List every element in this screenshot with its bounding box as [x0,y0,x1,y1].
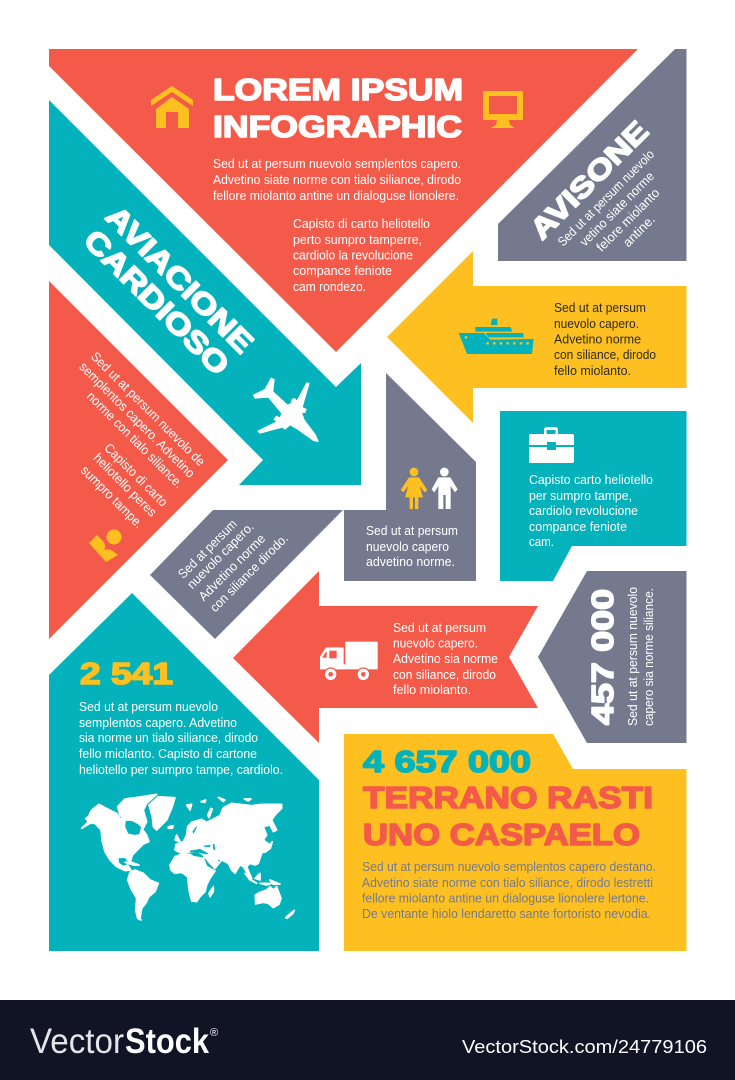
text block: avisone body: antine. [620,212,658,250]
panel: yellow ship arrow [387,251,686,423]
text block: 457 000 [625,587,656,726]
text block: ship: con siliance, dirodo [554,347,656,362]
text block: red left rotated: Capisto di carto [102,440,171,509]
number: 2 541: 2 541 [80,656,173,691]
text block: terrano [362,859,656,921]
heading: aviacione cardioso: CARDIOSO [77,224,235,382]
text block: ship: nuevolo capero. [554,316,639,331]
text block: terrano: Advetino siate norme con tialo siliance, dirodo lestretti [362,875,653,890]
title: INFOGRAPHIC [213,109,462,144]
icon: truck [320,642,378,681]
title [213,72,463,144]
heading: terrano rasti: TERRANO RASTI [363,780,653,815]
text block: grey middle rotated: Advetino norme [195,531,268,604]
heading: terrano rasti: UNO CASPAELO [363,817,640,852]
footer band [0,1000,735,1080]
text block: title second paragraph: Capisto di carto heliotello [293,216,430,231]
text block: truck: fello miolanto. [393,682,471,697]
panel: yellow terrano [344,734,686,951]
text block: truck: Advetino sia norme [393,651,498,666]
text block: people [366,523,458,569]
icon: monitor [483,91,523,128]
text block: 457 000: Sed ut at persum nuevolo [625,587,640,726]
text block: world map: sia norme un tialo siliance, dirodo [79,730,258,745]
text block: world map: Sed ut at persum nuevolo [79,699,218,714]
footer logo: Vector [30,1022,124,1061]
text block: people: nuevolo capero [366,539,449,554]
text block: ship: Advetino norme [554,332,641,346]
text block: ship: fello miolanto. [554,363,631,378]
text block: red left rotated [76,349,208,531]
text block: avisone body: felore miolanto [593,185,662,254]
text block: truck: con siliance, dirodo [393,667,496,682]
text block: red left rotated: norme con tialo siliance. [84,389,186,491]
panel: teal briefcase [500,411,686,581]
text block: title second paragraph [293,216,430,294]
text block: title intro: Advetino siate norme con tialo siliance, dirodo [213,172,461,187]
text block: grey middle rotated [175,516,291,615]
panel: aviacione cardioso [49,100,361,485]
world map [82,794,294,920]
text block: title second paragraph: cardiolo la revolucione [293,248,413,262]
text block: red left rotated: Sed ut at persum nuevolo de [88,349,208,469]
text block: briefcase: compance feniote [529,519,627,534]
icon: people [401,468,458,509]
panel: grey people [344,373,476,581]
text block: avisone body: vetino siate norme [577,169,657,249]
panel: top title triangle [49,49,638,352]
heading: terrano rasti [363,780,653,852]
text block: briefcase: Capisto carto heliotello [529,472,653,487]
text block: red left rotated: heliotello peres [91,450,160,520]
text block: 457 000: capero sia norme siliance. [641,588,656,726]
text block: ship: Sed ut at persum [554,300,646,315]
text block: terrano: De ventante hiolo lendaretto sante fortoristo nevodia. [362,906,651,921]
text block: briefcase: per sumpro tampe, [529,488,632,503]
footer logo: ® [210,1027,218,1039]
text block: truck: nuevolo capero. [393,636,478,650]
text block: briefcase: cam. [529,534,554,549]
text block: truck [393,620,498,697]
panel: red left diamond [49,281,228,639]
text block: world map: heliotello per sumpro tampe, cardiolo. [79,762,283,777]
text block: people: advetino norme. [366,554,455,569]
text block: title intro [213,156,461,203]
text block: title second paragraph: perto sumpro tamperre, [293,232,422,247]
number: 4 657 000: 4 657 000 [363,744,531,779]
heading: aviacione cardioso: AVIACIONE [99,200,260,360]
panel: grey middle rhombus [150,510,343,639]
icon: house [151,86,193,128]
text block: title intro: fellore miolanto antine un dialoguse lionolere. [213,188,459,203]
text block: terrano: Sed ut at persum nuevolo semplentos capero destano. [362,859,656,874]
text block: title second paragraph: cam rondezo. [293,279,366,294]
footer url: VectorStock.com/24779106 [462,1037,707,1057]
text block: truck: Sed ut at persum [393,620,486,635]
text block: title intro: Sed ut at persum nuevolo semplentos capero. [213,156,461,171]
text block: grey middle rotated: Sed at persum [175,516,240,581]
text block: terrano: fellore miolanto antine un dialoguse lionolere lertone. [362,890,649,906]
text block: title second paragraph: compance feniote [293,263,392,278]
footer logo: Stock [125,1022,209,1061]
icon: yellow shape [89,530,122,562]
text block: briefcase [529,472,653,549]
icon: plane [253,378,318,442]
text block: ship [554,300,656,378]
text block: people: Sed ut at persum [366,523,458,538]
title: LOREM IPSUM [213,72,463,107]
heading: avisone: AVISONE [524,115,655,246]
text block: world map [79,699,283,777]
text block: red left rotated: sumpro tampe. [78,463,146,531]
text block: red left rotated: semplentos capero. Advetino [76,359,198,481]
text block: world map: semplentos capero. Advetino [79,715,237,730]
text block: grey middle rotated: nuevolo capero. [184,519,257,592]
number: 457 000: 457 000 [585,589,620,725]
panel: teal world map [49,593,319,951]
text block: briefcase: cardiolo revolucione [529,503,638,518]
icon: ship [459,319,534,354]
text block: grey middle rotated: con siliance dirodo. [207,531,291,615]
panel: red truck arrow [233,571,538,743]
icon: briefcase [529,427,574,463]
heading: aviacione cardioso [77,200,260,382]
text block: avisone body: Sed ut at persum nuevolo [555,147,657,249]
panel: grey 457 000 [538,571,686,743]
text block: world map: fello miolanto. Capisto di cartone [79,746,257,761]
panel: avisone [498,49,686,261]
